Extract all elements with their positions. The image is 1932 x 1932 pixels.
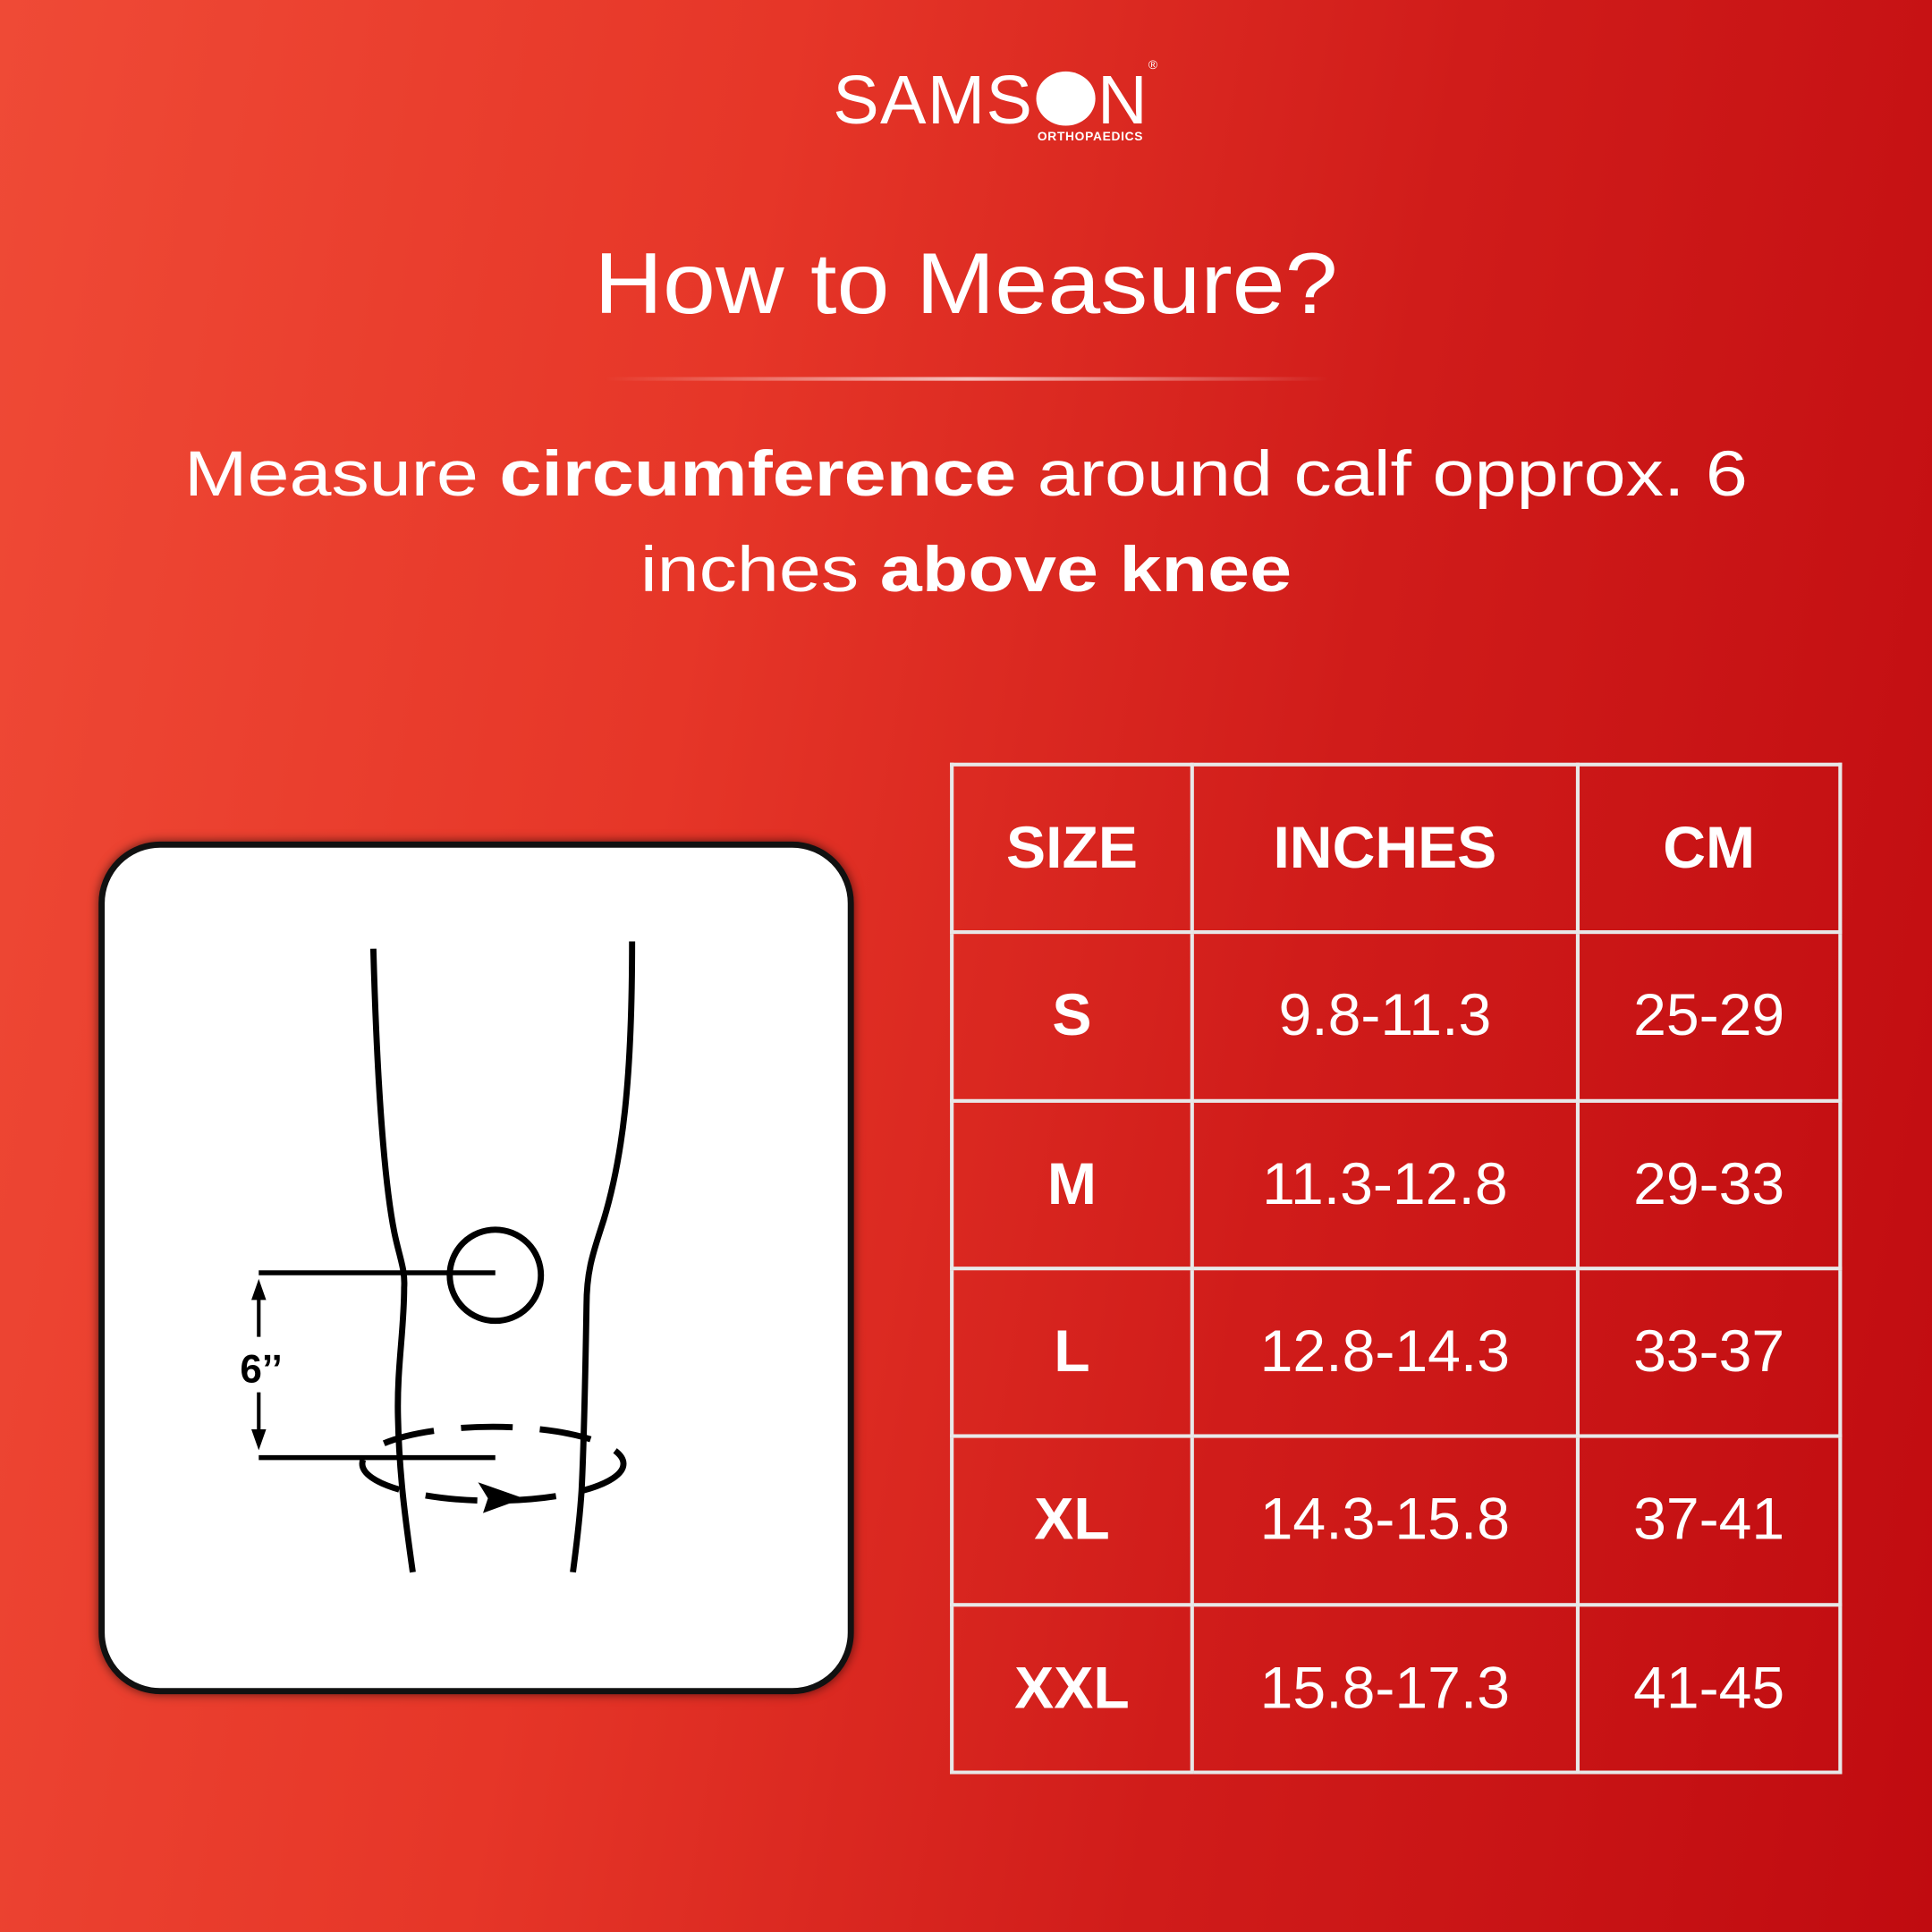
logo: SAMS N (833, 61, 1148, 138)
size table: SIZE (1006, 816, 1138, 881)
subtitle text: inches above knee (640, 535, 1292, 606)
subtitle text (184, 438, 1748, 606)
icon: leg outline (258, 941, 632, 1572)
size table: S (1052, 984, 1092, 1049)
subtitle text: Measure circumference around calf opprox. 6 (184, 438, 1748, 510)
size table: 25-29 (1633, 984, 1784, 1049)
logo (98, 59, 1157, 1653)
size table: 33-37 (1633, 1320, 1784, 1385)
arrow: dashed circumference (362, 1427, 623, 1513)
size table: L (1054, 1320, 1090, 1385)
size table: M (1047, 1152, 1097, 1217)
size table: 12.8-14.3 (1260, 1320, 1510, 1385)
arrow: 6 inch dimension (240, 1279, 283, 1450)
size table: 37-41 (1633, 1487, 1784, 1553)
logo: ORTHOPAEDICS (1038, 131, 1143, 144)
size table: 41-45 (1633, 1656, 1784, 1721)
size table: CM (1663, 816, 1755, 881)
size table: 15.8-17.3 (1260, 1656, 1510, 1721)
size table: XL (1034, 1487, 1110, 1553)
size table: 11.3-12.8 (1262, 1152, 1508, 1217)
size table: INCHES (1273, 816, 1496, 881)
arrow: 6 inch dimension: 6’’ (240, 1348, 283, 1392)
size table: XXL (1014, 1656, 1130, 1721)
logo: ® (1148, 59, 1157, 72)
size table (950, 762, 1843, 1775)
size table: 29-33 (1633, 1152, 1784, 1217)
size table: 14.3-15.8 (1260, 1487, 1510, 1553)
title: How to Measure? (594, 235, 1338, 332)
size table: 9.8-11.3 (1278, 984, 1491, 1049)
panel: measuring diagram card (98, 842, 854, 1694)
